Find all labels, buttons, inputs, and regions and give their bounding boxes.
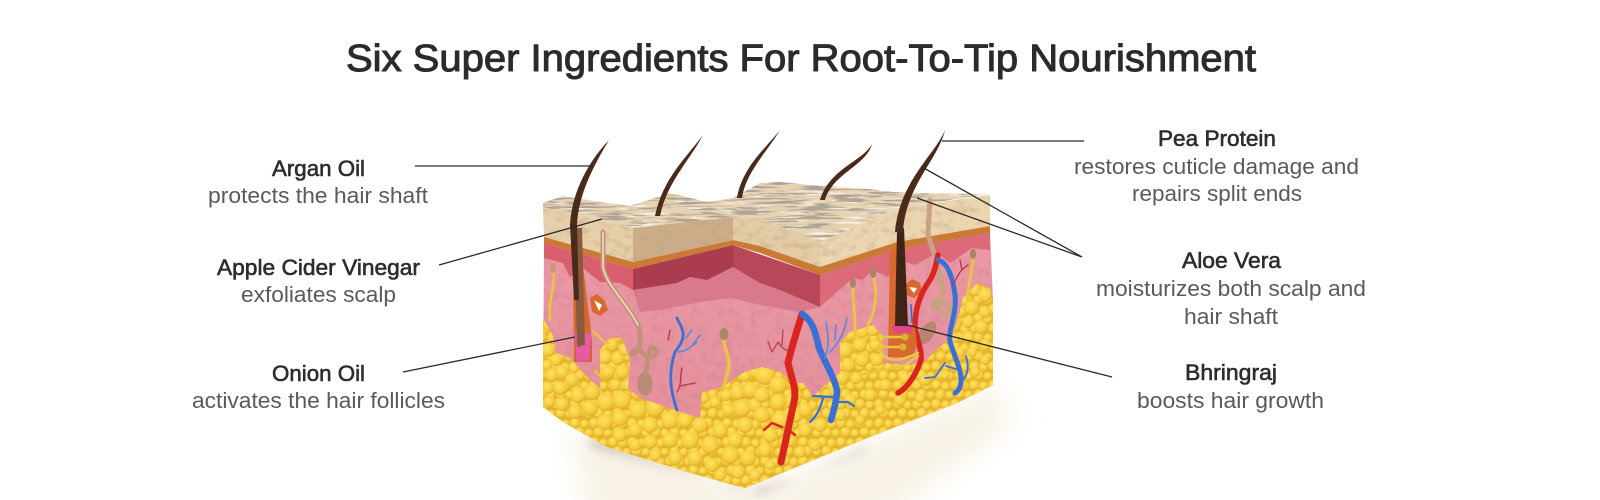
fat layer of yellow bubbles: [540, 280, 1000, 495]
label: Onion Oil: activates the hair follicles: [192, 388, 445, 413]
hair shafts: [570, 130, 945, 300]
label: Pea Protein: restores cuticle damage and: [1074, 154, 1359, 179]
right hair follicle: [860, 228, 918, 375]
label: Onion Oil: Onion Oil: [272, 361, 365, 386]
left hair follicle: [573, 228, 592, 362]
label: Aloe Vera: [1096, 248, 1366, 329]
scalp top surface: [540, 180, 995, 245]
pointer: Pea Protein: [942, 140, 1084, 142]
pointers: Aloe Vera: [917, 167, 1082, 257]
label: Bhringraj: Bhringraj: [1185, 360, 1277, 385]
label: Pea Protein: [1074, 126, 1359, 206]
upper dermis red layer: [544, 233, 990, 307]
label: Argan Oil: Argan Oil: [272, 156, 365, 181]
label: Pea Protein: Pea Protein: [1158, 126, 1276, 151]
skin cross-section diagram: [540, 130, 1010, 500]
label: Apple Cider Vinegar: Apple Cider Vinegar: [217, 255, 420, 280]
red artery and blue vein centre: [764, 314, 854, 462]
label: Apple Cider Vinegar: exfoliates scalp: [241, 282, 396, 307]
right glands and vessels: [898, 200, 968, 393]
pointer: Bhringraj: [903, 324, 1112, 377]
pink dermis base: [540, 230, 1000, 490]
yellow nerve centre: [720, 328, 729, 390]
label: Aloe Vera: hair shaft: [1184, 304, 1279, 329]
label: Bhringraj: boosts hair growth: [1137, 388, 1324, 413]
label: Aloe Vera: Aloe Vera: [1182, 248, 1282, 273]
label: Pea Protein: repairs split ends: [1132, 181, 1302, 206]
label: Onion Oil: [192, 361, 445, 413]
yellow nerves right: [850, 249, 976, 333]
orange band: [544, 226, 990, 275]
label: Argan Oil: protects the hair shaft: [208, 183, 429, 208]
dermal mound in notch: [633, 267, 820, 312]
scalp tan faces: [543, 195, 990, 267]
label: Aloe Vera: moisturizes both scalp and: [1096, 276, 1366, 301]
label: Bhringraj: [1137, 360, 1324, 413]
label: Argan Oil: [208, 156, 429, 208]
blue vein centre-left: [668, 318, 700, 410]
pointer: Onion Oil: [403, 337, 575, 372]
title: Six Super Ingredients For Root-To-Tip Nourishment: [346, 38, 1256, 80]
ground shadow: [570, 385, 1010, 500]
pointer: Apple Cider Vinegar: [439, 219, 602, 265]
pointer: Argan Oil: [415, 165, 593, 167]
label: Apple Cider Vinegar: [217, 255, 420, 307]
left glands and nerves: [550, 232, 657, 396]
